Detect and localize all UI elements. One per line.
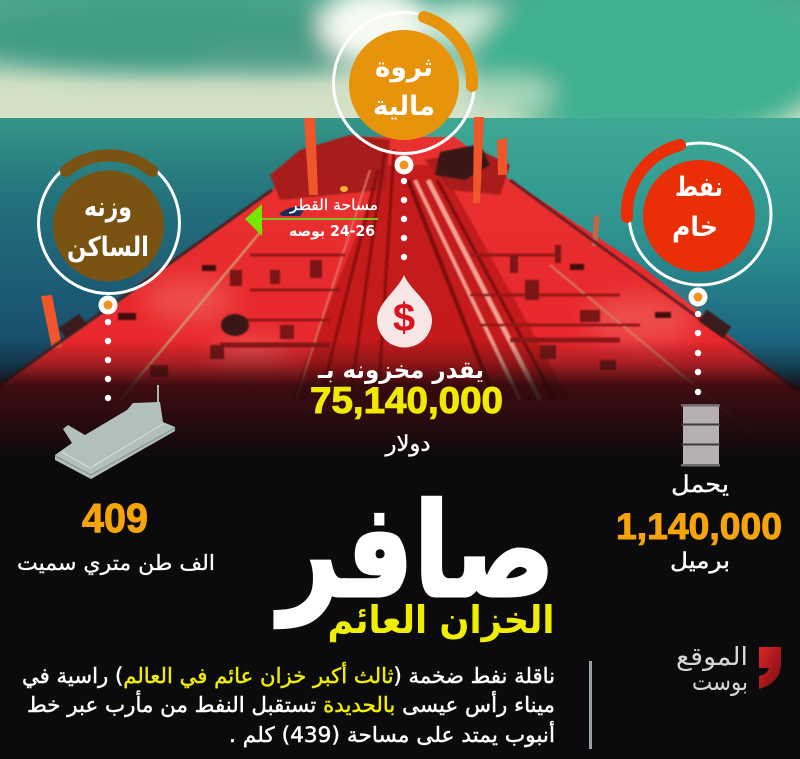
badge label: نفط <box>675 172 723 203</box>
ship deck <box>0 137 800 460</box>
icon: money drop: $ <box>393 296 415 340</box>
badge label <box>67 192 149 263</box>
panel: crude oil badge <box>627 143 771 285</box>
badge label: مالية <box>373 91 435 122</box>
callout: diameter arrow: مساحة القطر <box>289 196 378 214</box>
badge arc <box>627 145 680 217</box>
stat: deadweight: الف طن متري سميت <box>17 551 215 575</box>
callout: diameter arrow <box>245 196 378 240</box>
badge label <box>373 52 435 122</box>
connector: oil dots <box>688 288 708 395</box>
callout: diameter arrow: 24-26 بوصه <box>289 222 375 240</box>
superstructure <box>270 135 510 200</box>
masts <box>41 117 600 349</box>
logo: Al-Mawqea Post: الموقع <box>676 642 748 672</box>
connector: wealth dots <box>394 156 414 260</box>
stat: barrels: برميل <box>670 549 730 574</box>
divider rule <box>589 661 592 749</box>
stat: value in dollars: 75,140,000 <box>310 380 503 421</box>
stat: barrels: يحمل <box>671 472 729 498</box>
description text: أنبوب يمتد على مساحة (439) كلم . <box>229 721 555 748</box>
stat: value in dollars: يقدر مخزونه بـ <box>317 356 484 384</box>
lower dark fade <box>0 340 800 460</box>
badge disc <box>53 170 164 282</box>
pale deck patches <box>145 278 695 364</box>
badge disc <box>643 160 755 272</box>
stat: deadweight: 409 <box>82 495 148 541</box>
panel: financial wealth badge <box>334 12 474 154</box>
badge label <box>672 172 723 243</box>
logo: Al-Mawqea Post <box>676 642 781 696</box>
icon: money drop <box>377 275 432 347</box>
connector: weight dots <box>98 296 118 401</box>
icon: tanker model <box>55 385 175 479</box>
badge arc <box>424 17 472 86</box>
deck pipelines <box>0 150 800 440</box>
logo: Al-Mawqea Post: بوست <box>692 668 748 696</box>
badge label: وزنه <box>84 192 132 223</box>
description text: ميناء رأس عيسى بالحديدة تستقبل النفط من مأرب عبر خط <box>27 690 555 717</box>
badge label: الساكن <box>67 232 149 263</box>
badge label: ثروة <box>375 52 433 83</box>
panel: carrying weight badge <box>38 152 180 294</box>
stat: value in dollars <box>310 356 503 457</box>
subtitle: الخزان العائم <box>328 598 554 643</box>
deck fittings <box>59 245 731 377</box>
stat: barrels <box>616 472 782 574</box>
stat: deadweight <box>17 495 215 575</box>
description text <box>22 662 555 748</box>
stat: barrels: 1,140,000 <box>616 506 782 547</box>
title: صافر <box>274 475 555 628</box>
description text: ناقلة نفط ضخمة (ثالث أكبر خزان عائم في العالم) راسية في <box>22 662 555 689</box>
badge label: خام <box>672 212 718 243</box>
badge arc <box>66 155 152 171</box>
icon: oil barrel <box>681 404 720 466</box>
central pipe corridor <box>290 165 570 400</box>
stat: value in dollars: دولار <box>384 432 430 457</box>
badge disc <box>349 30 459 140</box>
